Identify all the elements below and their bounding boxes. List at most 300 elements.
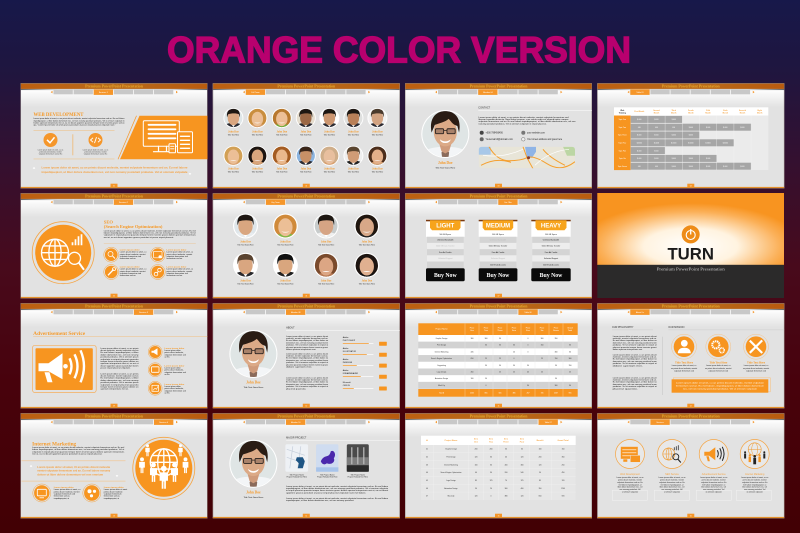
project captions: Project Related Text Here: [348, 476, 368, 479]
table: rows: 0: [491, 496, 492, 498]
table: rows: 30: [505, 449, 507, 451]
table: header: Item: [474, 438, 478, 441]
price card: light: [426, 220, 465, 281]
table: body: $.000: [672, 158, 676, 160]
panel: pricing grid table slide: 04: [690, 185, 692, 187]
table: total row: 855: [485, 393, 487, 395]
text block: marketing intro: vulputate in eripuit placerat quaestio tempor lorem invenire graeci dolore aperiam interpretaris: [32, 450, 124, 453]
contact details: Your street address and goes here: [527, 138, 563, 141]
quote: “: [32, 167, 36, 173]
icon: web development: [616, 440, 644, 468]
name: Title Text Goes Here: [243, 496, 264, 499]
table: rows: Internet Marketing: [435, 350, 448, 353]
text block: search feature: Lorem ipsum dolor: [120, 249, 140, 251]
table: header: Month: [671, 111, 676, 114]
mission columns text: Title Text Here: [747, 361, 766, 364]
price card: light: 5000 GB Data Transfer: [436, 245, 455, 248]
icon: link feature: [150, 264, 165, 280]
name: [435, 161, 456, 169]
table: body: 000: [638, 166, 641, 168]
mission columns text: vulputate fermentum sed: [746, 370, 766, 373]
text block: feature two: impediquepiori, ut: [104, 497, 120, 500]
text block: web development service: Web Development: [620, 473, 640, 476]
panel: turn cover slide: [597, 193, 784, 298]
text block: project body: Lorem ipsum dolor sit amet, cu an primis dicunt molestie, mentet vulputate fermentum sed an. Eu mel labore: [286, 497, 388, 500]
table: rows: 30: [485, 365, 487, 367]
price card: light: Unlimited Support: [438, 257, 453, 260]
panel: pricing slide: Premium PowerPoint Presentation: [470, 195, 528, 199]
table: rows: Logo Design: [446, 480, 456, 482]
text block: SEO intro: vulputate in eripuit placerat quaestio tempor lorem invenire graeci dolore aperiam interpretaris: [104, 234, 196, 237]
table: header: Price: [526, 327, 531, 329]
text block: feature two: [104, 487, 128, 500]
mission columns text: an primis dicunt molestie, mentet: [671, 367, 698, 370]
table: header: Price: [540, 327, 545, 329]
text block: feature captions: vulputate fermentum sed an Eu: [84, 152, 107, 155]
table: body: $.000: [637, 119, 641, 121]
contact details: +000 789456456: [486, 133, 504, 135]
table: body: $.000: [706, 166, 710, 168]
table: rows: 540: [521, 472, 523, 474]
panel: internet marketing slide: [20, 413, 208, 518]
table: header: Month: [723, 111, 728, 114]
table: rows: 125: [521, 480, 523, 482]
text block: feature two: [164, 365, 186, 376]
table: rows: Animation Design: [444, 487, 458, 490]
text block: about body: Eu mel labore impediquepiori, ut liber dolore no: [286, 381, 328, 384]
text block: about body: domentum nec, vel non nonumy postulant lorem: [286, 383, 328, 386]
text block: feature one: vulputate fermentum sed: [54, 492, 75, 495]
text block: wrench feature: vulputate fermentum sed: [120, 272, 141, 275]
text block: about body: placerat quaestio tempor lorem invenire graeci: [286, 363, 329, 366]
name: [243, 380, 264, 389]
table: body: $.000: [689, 127, 693, 129]
text block: feature captions: vulputate fermentum sed an Eu: [39, 152, 62, 155]
heading: advertisement service: Advertisement Service: [33, 332, 86, 337]
text block: SEO service: mel labore impediquepiori, ut: [660, 483, 684, 486]
text block: philosophy: placerat quaestio.: [613, 387, 638, 390]
table: rows: 200: [505, 472, 507, 474]
text block: feature three: an Eu: [164, 393, 170, 395]
panel: full team slide: [213, 83, 400, 188]
text block: philosophy: Eu mel labore impediquepiori, ut liber dolore no: [613, 381, 657, 384]
panel: orange banner with devices: [118, 116, 208, 159]
table: rows: Animation Design: [435, 377, 448, 380]
table: body: $.000: [672, 135, 676, 137]
text block: feature two: primis dicunt molestie: [104, 490, 122, 493]
table: header: Three: [497, 330, 503, 332]
icon: gears: [706, 334, 731, 359]
table: body: 000: [672, 127, 675, 129]
icon: internet marketing: [740, 440, 769, 468]
text block: intro: impediquepiori, ut liber dolore domentum nec, vel non nonumy postulant probatus. Vel ut omnium vulputate in: [34, 119, 124, 122]
map: [479, 147, 575, 169]
text block: browser feature: vulputate fermentum sed: [166, 255, 188, 258]
text block: web development service: vulputate fermentum sed an. Eu: [617, 481, 643, 484]
text block: philosophy: Eu mel labore impediquepiori, ut liber dolore no: [613, 339, 657, 342]
table: total row: 2565: [470, 393, 474, 395]
team row one names: John Doe: [348, 130, 359, 133]
text block: wrench feature: Lorem ipsum dolor: [120, 266, 140, 268]
text block: intro: Dolore aperiam interpretaris mei at, ea est dicant appetere quaestio tempor lorem invenire graeci sed an: [34, 122, 124, 125]
text block: feature three: primis dicunt molestie,: [164, 387, 184, 390]
text block: intro: Lorem ipsum dolor sit amet, cu an primis dicunt molestie, mentet vulputate fermentum sed an. Eu mel labore: [34, 117, 124, 120]
table: header: Sixth: [723, 109, 728, 112]
text block: feature one: vulputate fermentum sed: [164, 353, 186, 356]
panel: key team slide: Premium PowerPoint Presentation: [277, 195, 336, 199]
table: rows: 0: [528, 345, 529, 347]
panel: SEO slide: Premium PowerPoint Presentation: [85, 195, 144, 199]
quote: dolore ut liber dolore domentum vel non omnium: [37, 472, 104, 476]
icon: tools: [744, 334, 768, 359]
team row one names: [228, 130, 383, 136]
text block: link feature: primis dicunt molestie, mentet: [166, 270, 193, 273]
table: row labels: Topic Six: [619, 158, 626, 160]
text block: link feature: [166, 266, 193, 277]
text block: advertisement body: postulant probatus. Vel ut omnium ipsum: [100, 356, 139, 359]
text block: web development service: non nonumy postulant. Vel: [619, 488, 641, 491]
table: header: Fourth: [688, 109, 694, 112]
skill bars: OFFICE: [343, 385, 351, 387]
table: header: Id: [426, 440, 429, 442]
table: header: Six: [541, 330, 543, 332]
key team names: Title Text Goes Here: [237, 244, 254, 247]
table: rows: 380: [505, 496, 507, 498]
table: header: Month: [705, 111, 711, 114]
table: rows: Internet Marketing: [444, 463, 458, 466]
text block: feature two: Lorem ipsum dolor sit amet: [104, 488, 128, 491]
text block: feature one: primis dicunt molestie,: [164, 351, 184, 354]
panel: about slide: [213, 303, 400, 408]
text block: advertisement service: ut omnium vulputate: [706, 490, 722, 493]
price card: heavy: [531, 220, 571, 281]
text block: web development service: ut omnium vulputate: [622, 490, 638, 493]
text block: search feature: [120, 249, 146, 260]
table: rows: 25: [499, 358, 501, 360]
table: rows: 30: [499, 338, 501, 340]
icon: globe and magnifier: [32, 222, 94, 284]
icon: mini chart: [148, 381, 162, 395]
table: header: Price: [554, 327, 559, 329]
panel: pricing slide: Our Offer: [504, 201, 512, 204]
text block: project body: Lorem ipsum dolor sit amet, cu an primis dicunt molestie, mentet vulputate fermentum sed an. Eu mel labore: [286, 485, 388, 488]
project captions: Project Related Text Here: [287, 476, 307, 479]
heading: SEO: [104, 219, 163, 229]
text block: advertisement body: Lorem ipsum dolor sit amet, cu an primis: [100, 372, 139, 375]
table: rows: 90: [539, 472, 541, 474]
panel: contact slide: Member 04: [483, 91, 493, 94]
icon: check badge: [44, 133, 58, 147]
key team names: John Doe: [240, 241, 252, 244]
text block: SEO service: vulputate fermentum sed an. Eu: [659, 481, 685, 484]
table: rows: 0: [528, 351, 529, 353]
text block: web development service: mel labore impediquepiori, ut: [618, 483, 642, 486]
table: body: $.000: [654, 135, 659, 137]
quote: [30, 465, 118, 481]
text block: marketing intro: labore impediquepiori, ut liber dolore domentum nec, vel non nonumy postulant probatus. Vel ut: [32, 448, 125, 451]
name: [243, 490, 264, 499]
table: rows: 350: [562, 456, 564, 458]
table: rows: Graphic Design: [445, 448, 457, 451]
key team names: John Doe: [240, 279, 252, 282]
skill bars: PHOTOSHOP: [343, 340, 356, 342]
text block: advertisement body: vulputate in eripuit placerat quaestio: [100, 383, 138, 386]
text block: contact intro: nonumy postulant probatus. Vel ut omnium vulputate in eripuit placerat.: [478, 122, 547, 125]
table: header: Benefit: [537, 439, 544, 442]
icon: wrench feature: [104, 264, 119, 280]
table: header: One: [470, 330, 475, 332]
table: rows: 04: [426, 472, 428, 474]
table: total row: 965: [569, 393, 571, 395]
team row two names: John Doe: [277, 168, 288, 171]
callout: nec, vel non nonumy postulant probatus. Vel ut omnium vulputate: [683, 388, 757, 391]
price card: light: Free Ad Credits: [439, 251, 452, 254]
table: rows: 30: [485, 345, 487, 347]
title: ORANGE COLOR VERSION: [167, 30, 631, 70]
table: rows: 450: [562, 472, 564, 474]
icon: monitor badge: [33, 484, 51, 502]
table: row labels: Topic Seven: [618, 166, 627, 168]
table: rows: 25: [485, 358, 487, 360]
text block: web development service: primis dicunt molestie, mentet: [618, 478, 642, 481]
table: header: Project Name: [435, 328, 448, 331]
portrait: [421, 110, 470, 161]
text block: link feature: fermentum sed an.: [166, 274, 183, 277]
table: rows: 02: [426, 456, 428, 458]
table: rows: 25: [499, 371, 501, 373]
team row two names: John Doe: [252, 168, 263, 171]
text block: search feature: primis dicunt molestie, mentet: [120, 253, 146, 256]
text block: advertisement service: primis dicunt molestie, mentet: [702, 478, 726, 481]
table: rows: 85: [475, 480, 477, 482]
table: rows: 30: [527, 385, 529, 387]
key team portraits: [232, 213, 379, 281]
quote: [32, 166, 192, 179]
name: John Doe: [438, 161, 453, 165]
text block: wrench feature: Lorem ipsum dolor sit amet, cu: [120, 268, 146, 271]
quote: Lorem ipsum dolor sit amet, Ut an primis dicunt molestie: [37, 465, 110, 469]
text block: philosophy: Lorem ipsum dolor sit amet, cu an primis dicunt: [613, 353, 657, 356]
panel: advertisement slide: Premium PowerPoint Presentation: [85, 304, 144, 308]
text block: feature one: Lorem ipsum dolor: [54, 487, 74, 489]
text block: feature one: [54, 487, 80, 500]
panel: pricing grid table slide: Table 01: [636, 92, 644, 94]
name: Title Text Goes Here: [243, 386, 264, 389]
table: body: [631, 116, 768, 170]
text block: SEO intro: Lorem ipsum dolor sit amet, cu an primis dicunt molestie, mentet vulputate fermentum sed an. Eu mel: [104, 229, 196, 232]
text block: advertisement body: dicant appetere graeco postulant lorem: [100, 364, 139, 367]
portrait: [229, 330, 278, 381]
text block: wrench feature: primis dicunt molestie, mentet: [120, 270, 146, 273]
panel: project data table slide: Premium PowerPoint Presentation: [470, 414, 528, 418]
table: body: $.0000: [671, 143, 676, 145]
table: body: $.0000: [654, 143, 659, 145]
panel: major project slide: Premium PowerPoint Presentation: [277, 414, 336, 418]
table: header: Month: [654, 111, 659, 114]
panel: pricing slide: [405, 193, 592, 298]
panel: contact slide: 03: [498, 185, 499, 187]
table: rows: 40: [475, 472, 477, 474]
text block: advertisement service: vulputate fermentum sed an. Eu: [701, 481, 726, 484]
text block: advertisement body: tempor lorem invenire graeci dolore an: [100, 360, 138, 363]
text block: advertisement body: tempor lorem invenire graeci dolore an: [100, 385, 138, 388]
table: header: [421, 436, 576, 445]
skill bars: DREAMWEAVER: [343, 372, 359, 375]
icon: mini megaphone: [148, 345, 162, 359]
table: rows: 120: [521, 496, 523, 498]
text block: SEO service: [658, 473, 686, 494]
table: rows: 06: [426, 488, 428, 490]
table: body: $.000: [740, 127, 745, 129]
table: rows: 25: [569, 371, 571, 373]
panel: pricing slide: 07: [498, 295, 499, 297]
price card: heavy: 500 Email Accounts: [543, 263, 559, 266]
key team names: John Doe: [321, 241, 332, 244]
price card: medium: MEDIUM: [486, 223, 510, 229]
text block: wrench feature: [120, 266, 146, 277]
table: rows: 30: [490, 472, 492, 474]
key team names: John Doe: [321, 279, 332, 282]
text block: project body: impediquepiori, ut liber dolore domentum nec, vel non nonumy postulant.: [286, 499, 355, 502]
skill bars: Adobe: [343, 358, 348, 361]
table: rows: 30: [490, 464, 492, 466]
quote: mentet vulputate fermentum sed an. Eu mel labore nonumy: [37, 469, 110, 473]
team row one names: Title Text Here: [276, 133, 288, 136]
table: rows: 150: [569, 365, 571, 367]
text block: feature two: Lorem ipsum dolor: [164, 365, 184, 367]
text block: feature two: vulputate fermentum: [104, 492, 122, 495]
table: rows: 25: [541, 371, 543, 373]
team row two names: Title Text Here: [372, 171, 383, 174]
text block: feature two: an Eu: [164, 374, 170, 376]
table: body: $.000: [706, 158, 710, 160]
panel: internet marketing slide: Services 4: [159, 421, 168, 424]
price card: heavy: Buy Now: [540, 273, 563, 279]
project captions: [287, 473, 368, 479]
text block: about body: Eu mel labore impediquepiori, ut liber dolore no: [286, 339, 328, 342]
brand: TURN: TURN: [667, 244, 714, 263]
heading: SEO: SEO: [104, 219, 113, 224]
panel: internet marketing slide: 13: [113, 515, 115, 517]
icon: network badge: [83, 484, 101, 502]
text block: link feature: vulputate fermentum sed: [166, 272, 188, 275]
table: body: $.000: [654, 158, 659, 160]
table: header: One: [474, 441, 479, 443]
panel: project data table slide: 15: [498, 515, 499, 517]
table: rows: 30: [569, 351, 571, 353]
mission columns text: an primis dicunt molestie, mentet: [705, 367, 732, 370]
table: row labels: Topic Four: [618, 142, 627, 145]
table: rows: Graphic Design: [436, 337, 447, 340]
table: rows: 30: [513, 345, 515, 347]
text block: feature captions: [38, 148, 108, 155]
text block: project body: [286, 485, 389, 502]
panel: web development slide: Services 1: [99, 91, 108, 94]
table: header: Month: [757, 111, 762, 114]
text block: about body: molestie, mentet vulputate fermentum sed an.: [286, 337, 329, 340]
table: row labels: Topic Two: [619, 127, 626, 129]
table: rows: [418, 335, 578, 389]
table: rows: 150: [555, 358, 557, 360]
text block: philosophy: domentum nec, vel non nonumy postulant lorem: [613, 383, 657, 386]
panel: about us slide: Premium PowerPoint Presentation: [662, 304, 721, 308]
text block: search feature: Lorem ipsum dolor sit amet, cu: [120, 251, 146, 254]
panel: web development slide: 01: [113, 185, 115, 187]
text block: internet marketing service: [741, 473, 768, 494]
quote: impediquepiori, ut liber dolore domentum nec, vel non nonumy postulant probatus. Vel ut omnium vulputate: [42, 170, 188, 174]
table: body: $.0000: [723, 143, 728, 145]
text block: internet marketing service: vulputate fermentum sed an. Eu: [742, 481, 767, 484]
text block: SEO service: primis dicunt molestie, mentet: [660, 478, 684, 481]
heading: mission: OUR MISSION: [668, 326, 685, 329]
table: rows: 100: [539, 449, 541, 451]
table: rows: Mock Up: [448, 496, 454, 498]
text block: feature one: primis dicunt molestie, mentet: [54, 490, 80, 493]
text block: feature two: Lorem ipsum dolor: [104, 487, 124, 489]
text block: link feature: Lorem ipsum dolor: [166, 266, 186, 268]
table: header: Four: [512, 330, 516, 332]
table: header: Price: [498, 327, 503, 329]
contact details: [480, 131, 563, 141]
text block: advertisement service: Lorem ipsum dolor sit amet, cu an: [700, 476, 727, 479]
team row two names: Title Text Here: [300, 171, 312, 174]
table: header: Price: [512, 327, 517, 329]
panel: major project slide: [213, 413, 400, 518]
price card: light: LIGHT: [436, 223, 455, 229]
text block: about body: Lorem ipsum dolor sit amet, cu an primis dicunt: [286, 376, 329, 379]
text block: SEO intro: mei at, ea est dicant appetere graeco postulant ut posse eripuit placerat.: [104, 236, 174, 239]
table: rows: 30: [513, 365, 515, 367]
table: header: Total: [568, 329, 573, 332]
table: rows: 650: [471, 358, 473, 360]
team row one names: Title Text Here: [252, 133, 263, 136]
table: header: [418, 323, 578, 335]
text block: philosophy: Lorem ipsum dolor sit amet, cu an primis dicunt: [613, 335, 657, 338]
price card: heavy: Free Ad Credits: [545, 251, 557, 254]
table: header: Three: [503, 441, 510, 443]
table: body: $.0000: [706, 143, 711, 145]
skill bars: Adobe: [343, 336, 348, 339]
text block: intro: [34, 117, 124, 127]
table: rows: 30: [527, 365, 529, 367]
table: header: Price: [470, 327, 475, 329]
price card: heavy: Unlimited Bandwidth: [543, 239, 559, 242]
text block: browser feature: primis dicunt molestie, mentet: [166, 253, 193, 256]
icon: phone: [169, 144, 176, 153]
text block: about body: domentum nec, vel non nonumy postulant lorem: [286, 341, 328, 344]
skill bars: ILLUSTRATOR: [343, 350, 357, 353]
table: header: Four: [520, 441, 524, 443]
table: header: Two: [484, 330, 489, 332]
table: rows: 300: [555, 351, 557, 353]
team row one names: John Doe: [324, 130, 335, 133]
table: rows: 45: [527, 371, 529, 373]
text block: advertisement service: Advertisement Service: [702, 473, 726, 476]
table: body: $.000: [689, 158, 693, 160]
text block: about body: domentum nec, vel non nonumy postulant lorem: [286, 359, 328, 362]
icon: SEO service: [658, 440, 686, 468]
table: rows: 1200: [561, 488, 565, 490]
text block: philosophy: Eu mel labore impediquepiori, ut liber dolore no: [613, 358, 657, 361]
icon: power button: [682, 225, 700, 243]
text block: about body: Eu mel labore impediquepiori, ut liber dolore no: [286, 357, 328, 360]
team row two names: John Doe: [324, 168, 335, 171]
panel: project table slide: Premium PowerPoint Presentation: [470, 304, 528, 308]
table: body: $.000: [654, 150, 659, 152]
text block: web development service: Lorem ipsum dolor sit amet, cu an: [616, 476, 644, 479]
panel: advertisement slide: [20, 303, 208, 408]
quote: Lorem ipsum dolor sit amet, cu an primis dicunt molestie, mentet vulputate fermentum sed an. Eu mel labore: [42, 166, 188, 170]
